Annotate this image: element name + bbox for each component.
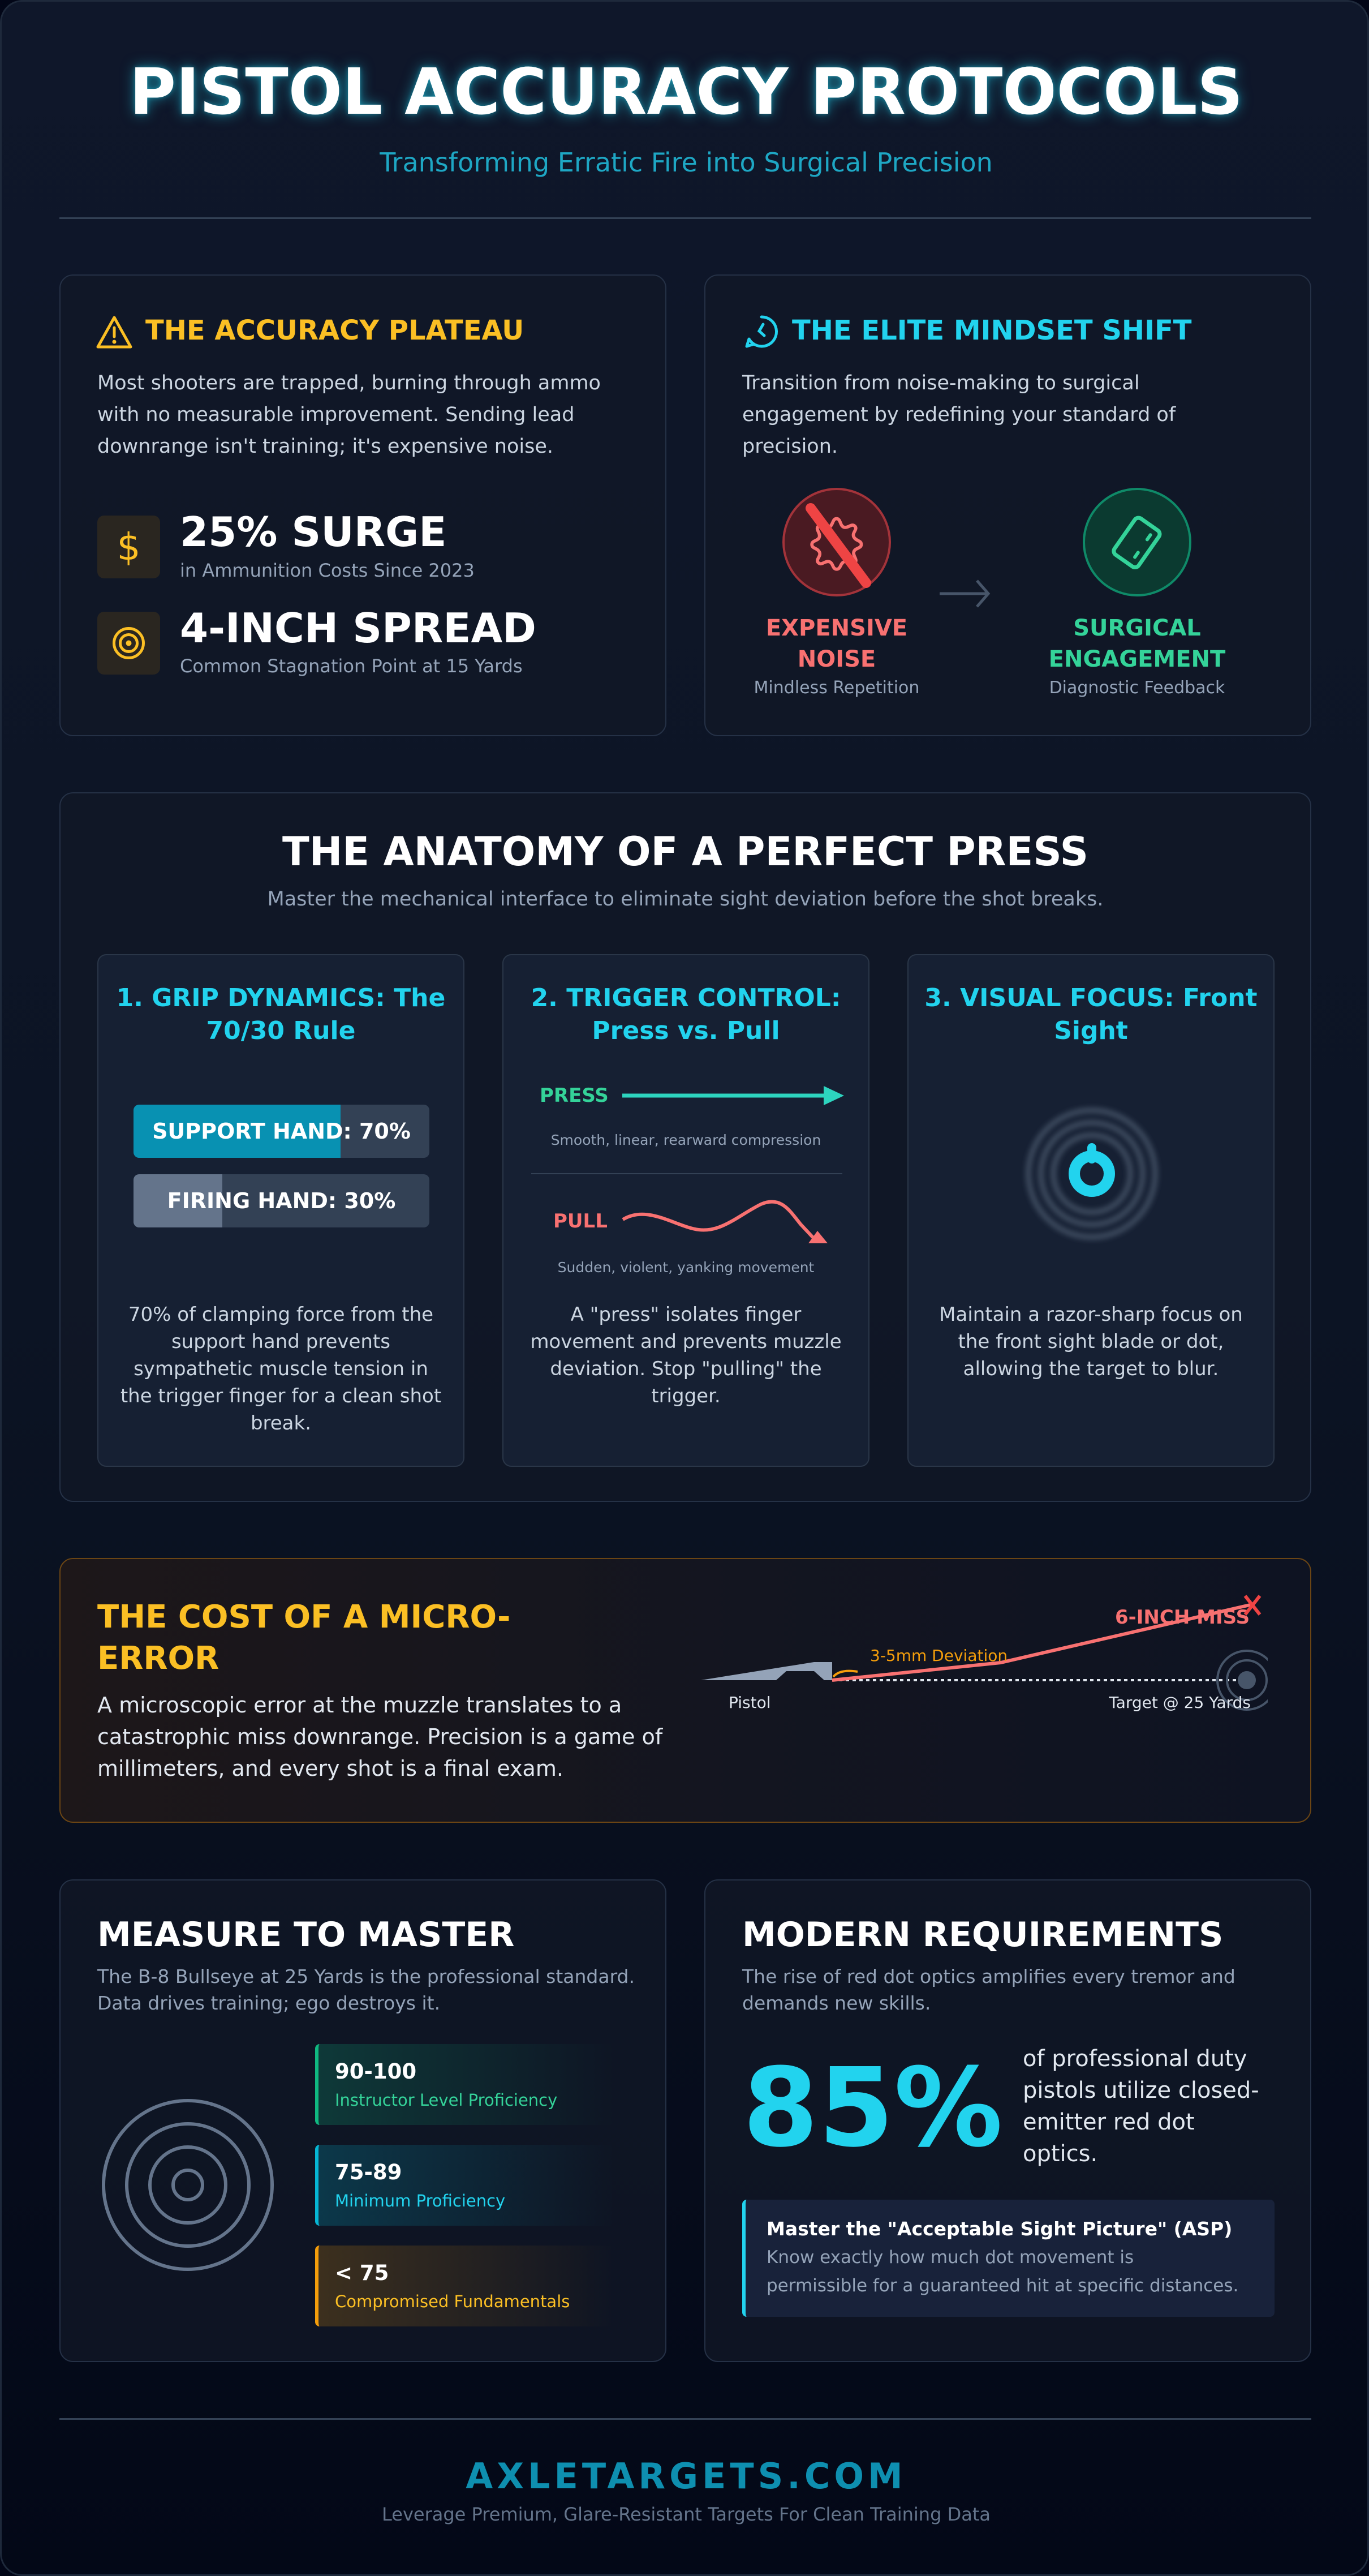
bar: firing hand [134,1174,429,1227]
card: grip dynamics: 70/30 Rule [206,1016,355,1045]
score: 90-100 [315,2044,615,2125]
score: under 75: Compromised Fundamentals [335,2292,570,2311]
body text: precision. [742,435,838,458]
text: movement and prevents muzzle [530,1330,842,1353]
label: expensive noise: EXPENSIVE [766,615,907,641]
icon: target [97,612,160,675]
subtitle: Transforming Erratic Fire into Surgical Precision [380,147,993,178]
card: trigger control [502,954,869,1467]
card: trigger control: 2. TRIGGER CONTROL: [531,984,841,1012]
panel: modern requirements: pistols utilize closed- [1023,2077,1259,2103]
score: 75-89 [315,2145,615,2226]
diagram: deviation: Pistol [729,1693,771,1712]
heading [97,1599,510,1677]
body text [742,372,1176,458]
title: PISTOL ACCURACY PROTOCOLS [130,55,1243,129]
heading: THE ELITE MINDSET SHIFT [792,315,1191,346]
text: allowing the target to blur. [963,1358,1219,1380]
text: the front sight blade or dot, [958,1330,1224,1353]
icon: dollar [97,516,160,578]
label: surgical engagement: SURGICAL [1073,615,1201,641]
body text [97,372,601,458]
panel: elite mindset shift: Diagnostic Feedback [1049,678,1225,698]
body text: downrange isn't training; it's expensive noise. [97,435,553,458]
icon: warning triangle [96,316,132,349]
panel: modern requirements: demands new skills. [742,1992,931,2014]
text [939,1303,1243,1380]
stat: 25% surge: 25% SURGE [180,508,446,556]
card: visual focus [907,954,1275,1467]
pistol [701,1662,832,1680]
body text [97,1689,662,1784]
panel: modern requirements: emitter red dot [1023,2109,1195,2135]
bar: support hand: SUPPORT HAND: 70% [152,1119,411,1144]
text: deviation. Stop "pulling" the [550,1358,822,1380]
big stat 85%: 85% [743,2045,1003,2171]
subheading: Master the mechanical interface to eliminate sight deviation before the shot breaks. [268,888,1103,911]
score: under 75: < 75 [335,2261,389,2285]
pull diagram: PULL [553,1210,608,1233]
panel: modern requirements: The rise of red dot optics amplifies every tremor and [742,1965,1235,1987]
icon: surgical engagement [1083,488,1191,596]
card: trigger control: Sudden, violent, yanking movement [558,1259,814,1276]
icon: expensive noise [782,488,891,596]
bar: support hand [134,1105,429,1158]
score: 75-89: Minimum Proficiency [335,2191,505,2210]
card: trigger control: Press vs. Pull [592,1016,780,1045]
card: grip dynamics: 1. GRIP DYNAMICS: The [117,984,445,1012]
text: sympathetic muscle tension in [134,1358,428,1380]
icon: clock [746,316,778,347]
stat: 25% surge [97,508,475,581]
body text: Most shooters are trapped, burning through ammo [97,372,601,394]
callout: ASP: Know exactly how much dot movement is [767,2247,1134,2268]
text: support hand prevents [171,1330,390,1353]
panel: modern requirements: MODERN REQUIREMENTS [742,1915,1223,1955]
text: the trigger finger for a clean shot [120,1385,441,1407]
stat: 4-inch spread [97,604,536,677]
stat: 25% surge: in Ammunition Costs Since 2023 [180,560,475,581]
heading: THE ANATOMY OF A PERFECT PRESS [282,828,1088,875]
footer tagline: Leverage Premium, Glare-Resistant Targets For Clean Training Data [382,2504,991,2525]
panel: measure to master: Data drives training; ego destroys it. [97,1992,440,2014]
label: expensive noise [766,615,907,672]
card: visual focus: 3. VISUAL FOCUS: Front [924,984,1258,1012]
icon: dollar: $ [117,525,140,569]
text: trigger. [651,1385,721,1407]
panel: measure to master: The B-8 Bullseye at 25 Yards is the professional standard. [97,1965,635,1987]
panel: modern requirements: of professional duty [1023,2046,1247,2072]
panel: modern requirements [704,1879,1311,2362]
card: visual focus: Sight [1054,1016,1128,1045]
bar: firing hand: FIRING HAND: 30% [167,1188,395,1213]
body text: millimeters, and every shot is a final exam. [97,1756,563,1781]
panel: elite mindset shift: Mindless Repetition [754,678,919,698]
card: trigger control: Smooth, linear, rearward compression [551,1132,821,1148]
label: surgical engagement: ENGAGEMENT [1049,646,1225,672]
text: break. [251,1412,311,1435]
score: under 75 [315,2246,615,2326]
panel: modern requirements: optics. [1023,2141,1097,2167]
panel: measure to master [59,1879,666,2362]
body text: Transition from noise-making to surgical [742,372,1140,394]
panel: the accuracy plateau [59,274,666,736]
diagram: deviation: Target @ 25 Yards [1108,1693,1251,1712]
callout: ASP: Master the "Acceptable Sight Picture" (ASP) [767,2218,1232,2240]
card: grip dynamics [97,954,464,1467]
body text: A microscopic error at the muzzle translates to a [97,1693,622,1718]
icon: bullseye [100,2097,275,2273]
heading: THE ACCURACY PLATEAU [145,315,524,346]
diagram: deviation [701,1595,1268,1712]
diagram: deviation: 3-5mm Deviation [870,1646,1008,1665]
stat: 4-inch spread: 4-INCH SPREAD [180,604,536,652]
diagram: deviation: 6-INCH MISS [1115,1606,1250,1629]
target [1217,1651,1276,1710]
icon: front sight [1023,1105,1160,1242]
body text: catastrophic miss downrange. Precision is a game of [97,1724,662,1749]
text: 70% of clamping force from the [128,1303,433,1326]
panel: cost of a micro-error [59,1558,1311,1823]
text: A "press" isolates finger [571,1303,801,1326]
text [530,1303,842,1407]
panel: measure to master: MEASURE TO MASTER [97,1915,514,1955]
callout: ASP [742,2200,1275,2317]
press diagram: PRESS [540,1084,609,1107]
text [120,1303,441,1435]
callout: ASP: permissible for a guaranteed hit at specific distances. [767,2276,1238,2296]
score: 90-100: 90-100 [335,2059,416,2084]
stat: 4-inch spread: Common Stagnation Point at 15 Yards [180,655,523,677]
label: surgical engagement [1049,615,1225,672]
text: Maintain a razor-sharp focus on [939,1303,1243,1326]
heading: ERROR [97,1640,219,1677]
panel: anatomy of a perfect press [59,792,1311,1502]
arrow [940,579,990,608]
body text: with no measurable improvement. Sending lead [97,403,574,426]
score: 75-89: 75-89 [335,2160,402,2184]
panel: elite mindset shift [704,274,1311,736]
body text: engagement by redefining your standard of [742,403,1176,426]
label: expensive noise: NOISE [798,646,876,672]
score: 90-100: Instructor Level Proficiency [335,2090,557,2110]
footer brand: AXLETARGETS.COM [466,2455,907,2497]
heading: THE COST OF A MICRO- [97,1599,510,1635]
